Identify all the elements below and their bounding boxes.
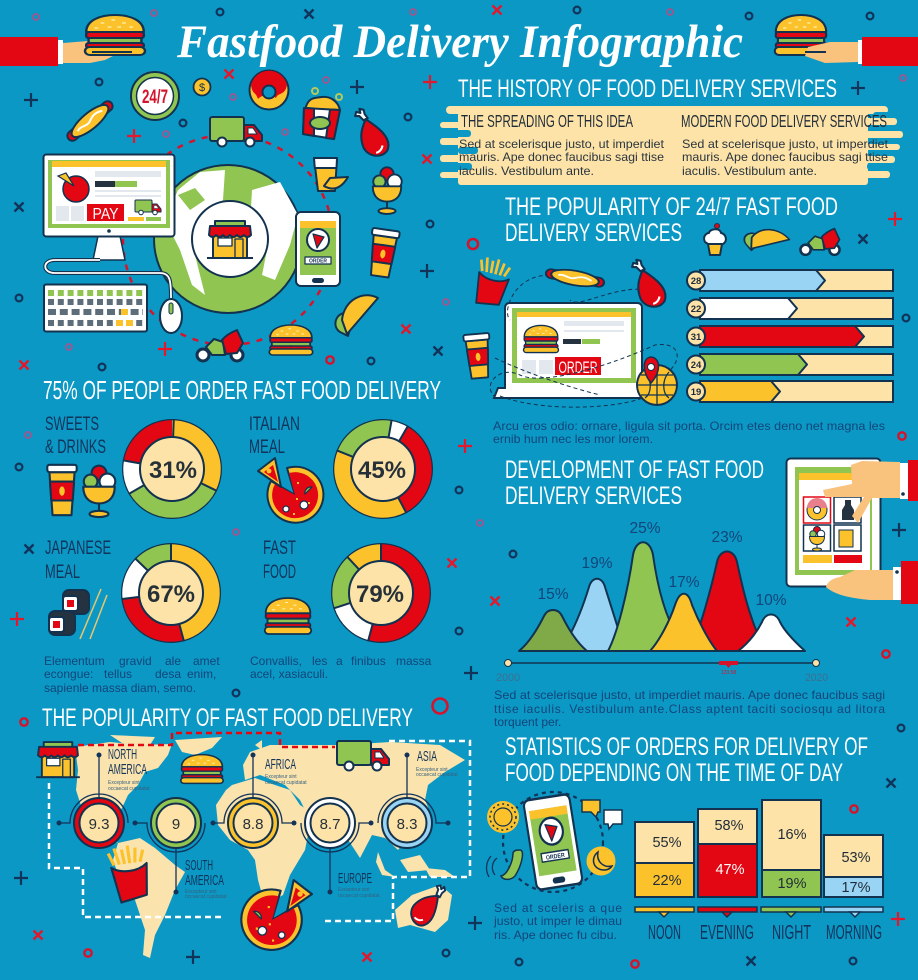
label: fast food: FOOD [263, 562, 296, 583]
icon: fries [107, 843, 152, 903]
label: Europe: EUROPE [338, 871, 372, 887]
text: right note: finibus [351, 654, 386, 668]
chart: donut 67% [121, 543, 221, 643]
text: 24/7 note [493, 419, 885, 446]
illustration: online ordering around the globe [44, 70, 402, 361]
ring: Africa 8.8: 8.8 [243, 816, 263, 833]
timeline [496, 660, 828, 684]
icon: computer monitor with PAY screen: PAY [92, 206, 119, 223]
label: Asia: Excepteur sint [416, 767, 448, 773]
icon: motorcycle small [800, 229, 840, 255]
label: South America [185, 858, 227, 900]
legend markers [635, 907, 883, 917]
chart: mountains [519, 542, 805, 651]
icon: left hand holding burger [0, 15, 145, 66]
illustration: phone with day-time icons [487, 792, 622, 892]
chart: horizontal arrow bars: 22 [691, 304, 701, 315]
chart: horizontal arrow bars: 28 [691, 276, 701, 287]
icon: juice and lemon [314, 158, 348, 191]
connectors [59, 755, 448, 892]
icon: computer monitor with PAY screen [44, 154, 174, 260]
label: italian meal: MEAL [249, 437, 285, 458]
label: japanese meal: MEAL [45, 562, 80, 583]
icon: taco [335, 295, 378, 336]
ring: Asia 8.3: 8.3 [397, 816, 417, 833]
label: sweets and drinks: & DRINKS [45, 437, 106, 458]
timeline: 2000 [496, 672, 520, 684]
text: development note: torquent per. [494, 715, 561, 729]
bar values: 16% [777, 827, 807, 843]
text: right note: a [336, 654, 343, 668]
label: South America: AMERICA [185, 873, 224, 889]
percent labels: 23% [711, 529, 743, 546]
heading: world popularity: THE POPULARITY OF FAST FOOD DELIVERY [42, 704, 413, 732]
text: modern: Sed at scelerisque justo, ut imperdiet [682, 137, 889, 151]
text: spreading: Sed at scelerisque justo, ut imperdiet [459, 137, 665, 151]
bar values: 58% [714, 818, 744, 834]
icon: ice cream [83, 466, 115, 517]
connector dots [56, 752, 450, 894]
panel: 75% of people order [43, 375, 441, 695]
illustration: laptop order: ORDER [558, 358, 598, 377]
label: Asia: ASIA [417, 749, 437, 765]
bar values: 47% [715, 862, 745, 878]
text: left note: sapienle massa diam, semo. [44, 681, 196, 695]
icon: 24/7 clock: 24/7 [142, 87, 168, 108]
chart: horizontal arrow bars: 19 [691, 387, 701, 398]
label: North America: Excepteur sint [108, 780, 140, 786]
text: right note: acel, xasiaculi. [250, 667, 328, 681]
heading: 24/7 popularity: DELIVERY SERVICES [505, 219, 682, 247]
time of day labels: NIGHT [772, 922, 811, 944]
icon: phone [523, 794, 583, 890]
icon: sun [487, 801, 519, 833]
icon: hot dog [63, 97, 117, 145]
label: Europe [338, 871, 380, 899]
text: right note: massa [396, 654, 432, 668]
label: Asia [416, 749, 458, 778]
icon: cupcake [704, 224, 726, 255]
chart: horizontal arrow bars: 24 [691, 360, 702, 371]
bar values: 53% [841, 850, 871, 866]
heading: development: DELIVERY SERVICES [505, 482, 682, 510]
icon: shop [36, 742, 80, 777]
label: South America: occaecat cupidatat [185, 894, 227, 900]
heading: 75 percent: 75% OF PEOPLE ORDER FAST FOOD DELIVERY [43, 375, 441, 405]
icon: keyboard [44, 284, 147, 332]
text: spreading: mauris. Ape donec faucibus sagi ttise [459, 150, 664, 164]
label: fast food [263, 538, 296, 583]
text: left note: tellus [104, 667, 132, 681]
time of day labels: EVENING [700, 922, 754, 944]
label: Africa: AFRICA [265, 757, 296, 773]
route: white dashed [49, 741, 470, 921]
icon: sushi and chopsticks [49, 589, 107, 639]
panel: history of food delivery services [432, 75, 903, 185]
chart: donut 31% [122, 419, 222, 519]
label: North America: AMERICA [108, 762, 147, 778]
text: phone note: justo, ut imper le dimau [493, 914, 622, 928]
chart: donut 45%: 45% [358, 457, 406, 484]
label: Europe: occaecat cupidatat [338, 893, 380, 899]
panel: popularity world map [36, 704, 470, 958]
text: left note: ale [165, 654, 181, 668]
label: italian meal [249, 414, 300, 458]
bar values: 19% [777, 876, 807, 892]
ring: North America 9.3: 9.3 [89, 816, 109, 833]
icon: shop in circle [192, 201, 268, 277]
time of day labels: NOON [648, 922, 681, 944]
text: spreading: iaculis. Vestibulum ante. [459, 164, 594, 178]
ring: Europe 8.7 [305, 798, 355, 848]
chart: donut 79%: 79% [356, 581, 404, 608]
icon: globe [154, 165, 302, 313]
chart: donut 31%: 31% [149, 457, 197, 484]
label: sweets and drinks: SWEETS [45, 414, 99, 435]
label: fast food: FAST [263, 538, 296, 559]
ring: South America 9 [151, 798, 201, 848]
icon: chat bubbles [582, 800, 622, 829]
percent labels: 25% [629, 520, 661, 537]
label: italian meal: ITALIAN [249, 414, 300, 435]
text: spreading [459, 137, 665, 178]
label: South America: SOUTH [185, 858, 213, 874]
icon: telephone [487, 850, 522, 879]
ring: South America 9: 9 [172, 816, 180, 833]
heading: 24/7 popularity [505, 193, 838, 247]
text: left note: econgue: [44, 667, 93, 681]
text: 24/7 note: ernib hum nec les mor lorem. [493, 432, 653, 446]
label: Asia: occaecat cupidatat [416, 772, 458, 778]
timeline: 123.58 [721, 670, 736, 676]
icon: truck [210, 117, 262, 146]
icon: taco small [741, 219, 790, 264]
heading: development [505, 456, 764, 510]
percent labels: 17% [668, 574, 700, 591]
icon: burger [269, 325, 313, 355]
bar values: 22% [652, 873, 682, 889]
text: modern: mauris. Ape donec faucibus sagi ttise [682, 150, 888, 164]
text: modern [682, 137, 889, 178]
text: left note: desa [155, 667, 181, 681]
illustration: tablet with hands [786, 458, 918, 604]
ring: Europe 8.7: 8.7 [320, 816, 340, 833]
icon: phone with pizza order [296, 212, 340, 286]
percent labels [537, 520, 787, 609]
icon: 24/7 clock [131, 72, 179, 120]
label: South America: Excepteur sint [185, 889, 217, 895]
icon: motorcycle [197, 330, 243, 361]
bar values [652, 818, 871, 896]
illustration: laptop order [490, 275, 677, 407]
icon: globe with location pin [637, 357, 677, 405]
label: Europe: Excepteur sint [338, 887, 370, 893]
text: left note: gravid [119, 654, 152, 668]
panel: development of services [494, 456, 918, 729]
text: left note: amet [193, 654, 220, 668]
icon: popcorn [303, 88, 342, 139]
text: development note: ttise iaculis. Vestibulum ante.Class aptent taciti sociosqu ad litora [494, 702, 885, 716]
route: red dashed [78, 733, 335, 747]
icon: drumstick [404, 883, 455, 929]
title: Fastfood Delivery Infographic [176, 16, 743, 68]
icon: ice cream [373, 167, 402, 214]
label: Africa: occaecat cupidatat [265, 780, 307, 786]
cream brush band [440, 106, 903, 185]
icon: burger [181, 755, 223, 783]
label: North America: occaecat cupidatat [108, 786, 150, 792]
label: sweets and drinks [45, 414, 106, 458]
icon: burger [265, 598, 311, 634]
text: modern: iaculis. Vestibulum ante. [682, 164, 817, 178]
text: phone note: Sed at sceleris a que [494, 901, 622, 915]
heading: development: DEVELOPMENT OF FAST FOOD [505, 456, 764, 484]
icon: right hand holding burger [775, 15, 918, 66]
panel: statistics by time of day [487, 733, 883, 944]
label: japanese meal [45, 538, 111, 583]
icon: dollar coin [194, 78, 210, 96]
ring: North America 9.3 [74, 798, 124, 848]
percent labels: 10% [755, 592, 787, 609]
text: development note: Sed at scelerisque justo, ut imperdiet mauris. Ape donec faucibus sagi [494, 688, 885, 702]
chart: horizontal arrow bars [687, 270, 893, 402]
icon: fries [471, 255, 513, 309]
icon: drumstick [355, 109, 388, 156]
ring: Africa 8.8 [228, 798, 278, 848]
text: phone note: ris. Ape donec fu cibu. [494, 928, 617, 942]
chart: donut 79% [331, 543, 431, 643]
icon: mouse and cable [45, 260, 182, 333]
icon: coffee [463, 333, 493, 379]
icon: coffee [47, 465, 77, 515]
label: Africa [265, 757, 307, 786]
label: japanese meal: JAPANESE [45, 538, 111, 559]
sub-heading: spreading: THE SPREADING OF THIS IDEA [461, 111, 633, 131]
percent labels: 19% [581, 555, 613, 572]
heading: statistics [505, 733, 868, 787]
label: North America [108, 747, 150, 792]
bar values: 17% [841, 880, 871, 896]
chart: horizontal arrow bars: 31 [691, 332, 702, 343]
label: Africa: Excepteur sint [265, 774, 297, 780]
icon: moon [586, 846, 616, 876]
text: right note: les [312, 654, 327, 668]
icon: dollar coin: $ [199, 82, 205, 94]
text: right note: Convallis, [250, 654, 302, 668]
icon: coffee cup [366, 228, 400, 278]
chart: donut 67%: 67% [147, 581, 195, 608]
text: 24/7 note: Arcu eros odio: ornare, ligula sit porta. Orcim etes deno net magna les [493, 419, 885, 433]
icon: hot dog [545, 266, 605, 290]
icon: truck [337, 741, 389, 770]
label: North America: NORTH [108, 747, 137, 763]
text: phone note [493, 901, 622, 942]
percent labels: 15% [537, 586, 569, 603]
panel: popularity of 24/7 services [463, 193, 893, 446]
icon: pizza [241, 880, 312, 950]
icon: drumstick [632, 260, 665, 307]
world map [75, 735, 465, 958]
ring: Asia 8.3 [382, 798, 432, 848]
chart: donut 45% [333, 419, 433, 519]
chart: stacked bars [635, 800, 883, 897]
text: left note: enim, [187, 667, 216, 681]
timeline: 2020 [805, 672, 828, 684]
bar values: 55% [652, 835, 682, 851]
icon: pizza [258, 458, 323, 523]
time of day labels [648, 922, 882, 944]
text: left note: Elementum [44, 654, 105, 668]
icon: donut [250, 70, 288, 110]
